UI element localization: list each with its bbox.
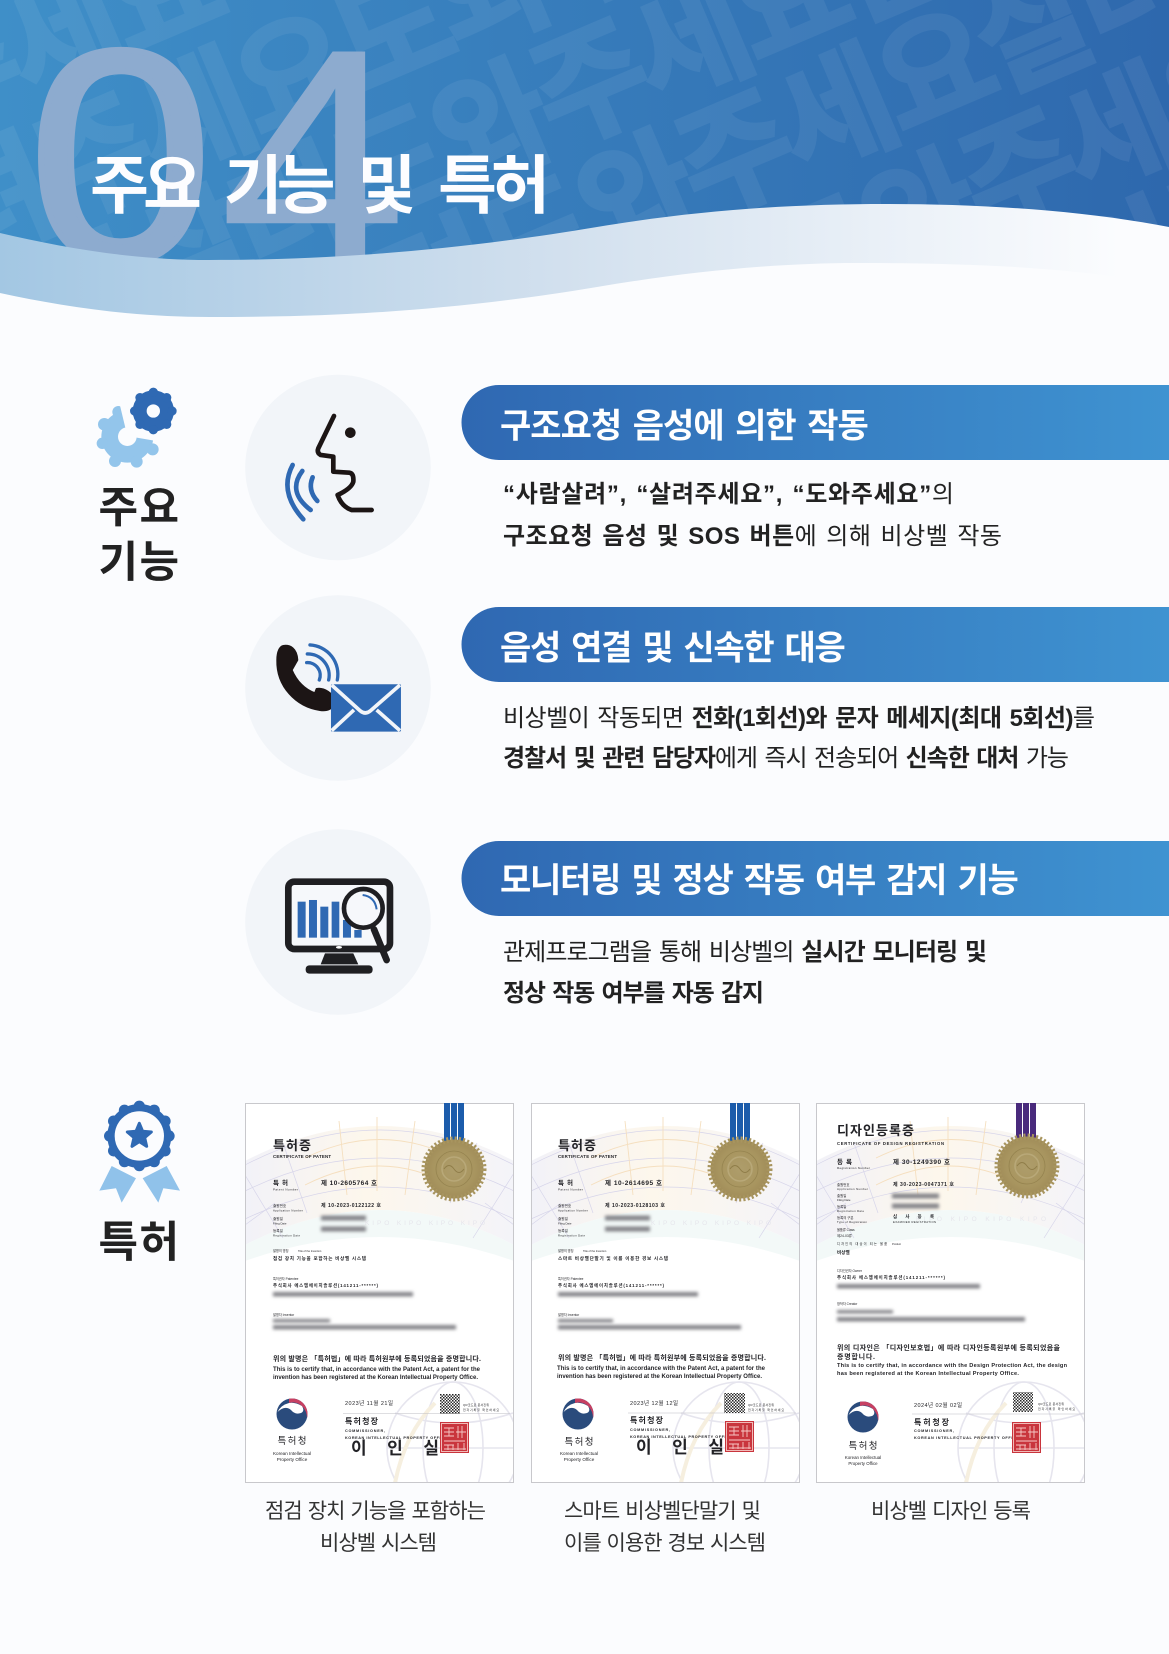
certificate 2: 제 10-2023-0128103 호	[605, 1202, 665, 1209]
feature 3: monitoring	[245, 829, 1169, 1015]
certificate 2: Registration Date	[558, 1234, 585, 1238]
icon: medal	[99, 1101, 180, 1203]
certificate 3: 증명합니다.	[837, 1352, 875, 1361]
certificate 3: 주식회사 에스엠에이치솔루션(141211-******)	[837, 1274, 946, 1281]
certificate 3: 위의 디자인은 「디자인보호법」에 따라 디자인등록원부에 등록되었음을	[837, 1343, 1061, 1352]
certificate 1: 이 인 실	[351, 1439, 439, 1458]
certificate 3: 등록일	[837, 1204, 846, 1209]
certificate 3: Filing Date	[837, 1198, 851, 1202]
certificate 1: Filing Date	[273, 1222, 287, 1226]
certificate 1: 전자기록물 확인하세요	[463, 1407, 499, 1412]
certificate 1: 출원번호	[273, 1203, 287, 1208]
certificate 1: CERTIFICATE OF PATENT	[273, 1154, 331, 1159]
certificate 3: 디자인등록증	[837, 1123, 914, 1138]
certificate 1: Patent Number	[273, 1188, 298, 1192]
certificate 1: 제 10-2023-0122122 호	[321, 1202, 381, 1209]
pill heading: 모니터링 및 정상 작동 여부 감지 기능	[500, 862, 1018, 900]
caption: certificate 1: 점검 장치 기능을 포함하는	[265, 1500, 486, 1523]
certificate 3: Registration Date	[837, 1209, 864, 1213]
certificate 1: invention has been registered at the Korean Intellectual Property Office.	[273, 1375, 478, 1381]
certificate 3: This is to certify that, in accordance with the Design Protection Act, the design	[837, 1363, 1068, 1369]
caption: certificate 1	[265, 1500, 486, 1555]
certificate 1: 위의 발명은 「특허법」에 따라 특허원부에 등록되었음을 증명합니다.	[273, 1354, 481, 1363]
ribbon	[444, 1103, 464, 1141]
pill heading	[462, 385, 1169, 460]
certificate 2: 특허권자 Patentee	[558, 1276, 584, 1281]
certificate 3: Property Office	[848, 1461, 878, 1466]
certificate 2: 제 10-2614695 호	[605, 1178, 662, 1187]
caption: certificate 2	[564, 1500, 765, 1555]
certificate 2: Title of the Invention	[583, 1249, 607, 1253]
heading: main features: 주요	[98, 484, 177, 532]
certificate 3: CERTIFICATE OF DESIGN REGISTRATION	[837, 1141, 944, 1146]
caption: certificate 2: 이를 이용한 경보 시스템	[564, 1532, 765, 1555]
certificate 1: 2023년 11월 21일	[345, 1399, 393, 1407]
icon: gears	[97, 388, 177, 468]
certificate 2: This is to certify that, in accordance with the Patent Act, a patent for the	[557, 1366, 766, 1372]
certificate 3	[816, 1103, 1090, 1514]
certificate 3: COMMISSIONER,	[914, 1429, 954, 1433]
certificate 1: Registration Date	[273, 1234, 300, 1238]
certificate 2: QR코드로 문서진위	[748, 1402, 774, 1407]
certificate 1: Application Number	[273, 1208, 303, 1212]
certificate 3: 디자인의 대상이 되는 물품	[837, 1241, 887, 1246]
certificate 1: KOREAN INTELLECTUAL PROPERTY OFFICE	[345, 1436, 447, 1440]
certificate 3: 출원번호	[837, 1182, 849, 1187]
caption: certificate 2: 스마트 비상벨단말기 및	[564, 1500, 760, 1523]
certificate 1: 특허청	[278, 1436, 306, 1447]
certificate 2: 주식회사 에스엠에이치솔루션(141211-******)	[558, 1282, 665, 1289]
certificate 3: Registration Number	[837, 1166, 870, 1170]
heading: main features	[98, 484, 177, 587]
description: “사람살려”, “살려주세요”, “도와주세요”의	[503, 481, 952, 508]
description	[503, 939, 986, 1007]
caption: certificate 3: 비상벨 디자인 등록	[871, 1500, 1031, 1523]
wave band	[0, 204, 1169, 317]
certificate 1: COMMISSIONER,	[345, 1429, 385, 1433]
certificate 2: 출원번호	[558, 1203, 572, 1208]
pill heading: 음성 연결 및 신속한 대응	[500, 630, 845, 668]
certificate 3: EXAMINED REGISTRATION	[893, 1220, 936, 1224]
pill heading: 구조요청 음성에 의한 작동	[500, 408, 868, 446]
certificate 1: KIPO KIPO KIPO KIPO	[365, 1220, 485, 1227]
certificate 2: Patent Number	[558, 1188, 583, 1192]
certificate 1: 제 10-2605764 호	[321, 1178, 377, 1187]
certificate 1: This is to certify that, in accordance with the Patent Act, a patent for the	[273, 1367, 481, 1373]
certificate 1: 특허증	[273, 1138, 311, 1153]
certificate 2: CERTIFICATE OF PATENT	[558, 1154, 617, 1159]
pill heading	[462, 841, 1169, 916]
certificate 2: 발명자 Inventor	[558, 1312, 580, 1317]
certificate 2: 등록일	[558, 1228, 568, 1233]
certificate 3: 특허청장	[914, 1417, 950, 1427]
certificate 2: Filing Date	[558, 1222, 572, 1226]
description	[503, 481, 1001, 550]
certificate 2: 특 허	[558, 1178, 573, 1187]
heading: patents: 특허	[98, 1219, 175, 1267]
description: 비상벨이 작동되면 전화(1회선)와 문자 메세지(최대 5회선)를	[503, 705, 1094, 732]
certificate 3: 등 록	[837, 1158, 852, 1166]
certificate 3: KOREAN INTELLECTUAL PROPERTY OFFICE	[914, 1436, 1019, 1440]
certificate 1: 발명의 명칭	[273, 1248, 289, 1253]
certificate 3: 제 30-1249390 호	[893, 1157, 950, 1166]
certificate 2: Korean Intellectual	[560, 1451, 598, 1456]
certificate 1: Title of the Invention	[298, 1249, 322, 1253]
ribbon	[1016, 1103, 1036, 1138]
certificate 3: 2024년 02월 02일	[914, 1401, 962, 1409]
certificate 3: QR코드로 문서진위	[1038, 1401, 1064, 1406]
feature 1: voice activation	[245, 375, 1169, 560]
certificate 3: 출원일	[837, 1193, 846, 1198]
description: 정상 작동 여부를 자동 감지	[503, 980, 762, 1007]
certificate 1: 주식회사 에스엠에이치솔루션(141211-******)	[273, 1282, 379, 1289]
ribbon	[730, 1103, 750, 1141]
certificate 2: KIPO KIPO KIPO KIPO	[651, 1220, 771, 1227]
certificate 3: Application Number	[837, 1187, 868, 1191]
certificate 1: QR코드로 문서진위	[463, 1402, 489, 1407]
certificate 2	[531, 1103, 805, 1514]
certificate 3: 창작자 Creator	[837, 1301, 858, 1306]
certificate 3: 등록의 구분	[837, 1215, 854, 1220]
icon circle: monitor with magnifier	[245, 829, 431, 1015]
certificate 3: Product	[892, 1242, 901, 1246]
certificate 3: has been registered at the Korean Intellectual Property Office.	[837, 1371, 1019, 1377]
certificate 2: COMMISSIONER,	[630, 1428, 670, 1432]
certificate 2: 발명의 명칭	[558, 1248, 574, 1253]
wave page edge	[0, 263, 1010, 330]
section: main features heading	[97, 388, 177, 587]
certificate 3: 제 30-2023-0047371 호	[893, 1181, 954, 1188]
pill heading	[462, 607, 1169, 682]
certificate 2: Property Office	[564, 1457, 595, 1462]
certificate 3: 심 사 등 록	[893, 1213, 934, 1220]
certificate 2: 출원일	[558, 1216, 568, 1221]
certificate 2: Application Number	[558, 1208, 588, 1212]
certificate 2: 스마트 비상벨단말기 및 이를 이용한 경보 시스템	[558, 1255, 668, 1262]
description: 관제프로그램을 통해 비상벨의 실시간 모니터링 및	[503, 939, 986, 966]
certificate 2: 특허증	[558, 1138, 596, 1153]
big section number	[38, 46, 398, 258]
feature 2: voice connection	[245, 595, 1169, 781]
certificate 1: 발명자 Inventor	[273, 1312, 295, 1317]
certificate 2: invention has been registered at the Korean Intellectual Property Office.	[557, 1374, 762, 1380]
certificate 1: 등록일	[273, 1228, 283, 1233]
certificate 3: 비상벨	[837, 1249, 850, 1256]
certificate 2: 이 인 실	[636, 1438, 724, 1457]
icon circle: speaking face	[245, 375, 431, 560]
certificate 3: KIPO KIPO KIPO KIPO	[916, 1216, 1046, 1223]
certificate 3: 디자인권자 Owner	[837, 1268, 863, 1273]
header banner	[0, 0, 1169, 317]
certificate 1: 점검 장치 기능을 포함하는 비상벨 시스템	[273, 1255, 366, 1262]
certificate 1: 특 허	[273, 1178, 288, 1187]
certificate 3: 전자기록물 확인하세요	[1038, 1406, 1075, 1411]
certificate 2: 전자기록물 확인하세요	[748, 1407, 784, 1412]
caption: certificate 1: 비상벨 시스템	[320, 1532, 436, 1555]
certificate 3: Korean Intellectual	[845, 1455, 881, 1460]
certificate 1: Property Office	[277, 1457, 308, 1462]
description: 경찰서 및 관련 담당자에게 즉시 전송되어 신속한 대처 가능	[503, 745, 1068, 772]
certificate 3: Type of Registration	[837, 1220, 867, 1224]
certificate 2: KOREAN INTELLECTUAL PROPERTY OFFICE	[630, 1435, 732, 1439]
certificate 1: 출원일	[273, 1216, 283, 1221]
certificate 2: 특허청	[564, 1437, 594, 1448]
certificate 3: 제24-03류	[837, 1233, 852, 1238]
icon circle: phone and envelope	[245, 595, 431, 781]
certificate 1	[245, 1103, 519, 1514]
certificate 2: 2023년 12월 12일	[630, 1399, 678, 1407]
certificate 1: 특허권자 Patentee	[273, 1276, 299, 1281]
certificate 2: 특허청장	[630, 1415, 664, 1425]
certificate 3: 특허청	[848, 1441, 878, 1452]
certificate 1: 특허청장	[345, 1416, 379, 1426]
heading: main features: 기능	[98, 539, 177, 587]
description: 구조요청 음성 및 SOS 버튼에 의해 비상벨 작동	[503, 523, 1001, 550]
section: patents heading	[98, 1101, 180, 1267]
certificate 3: 물품류 Class	[837, 1227, 855, 1232]
title: 주요 기능 및 특허	[90, 150, 544, 222]
certificate 1: Korean Intellectual	[273, 1451, 311, 1456]
description	[503, 705, 1094, 772]
certificate 2: 위의 발명은 「특허법」에 따라 특허원부에 등록되었음을 증명합니다.	[558, 1353, 766, 1362]
